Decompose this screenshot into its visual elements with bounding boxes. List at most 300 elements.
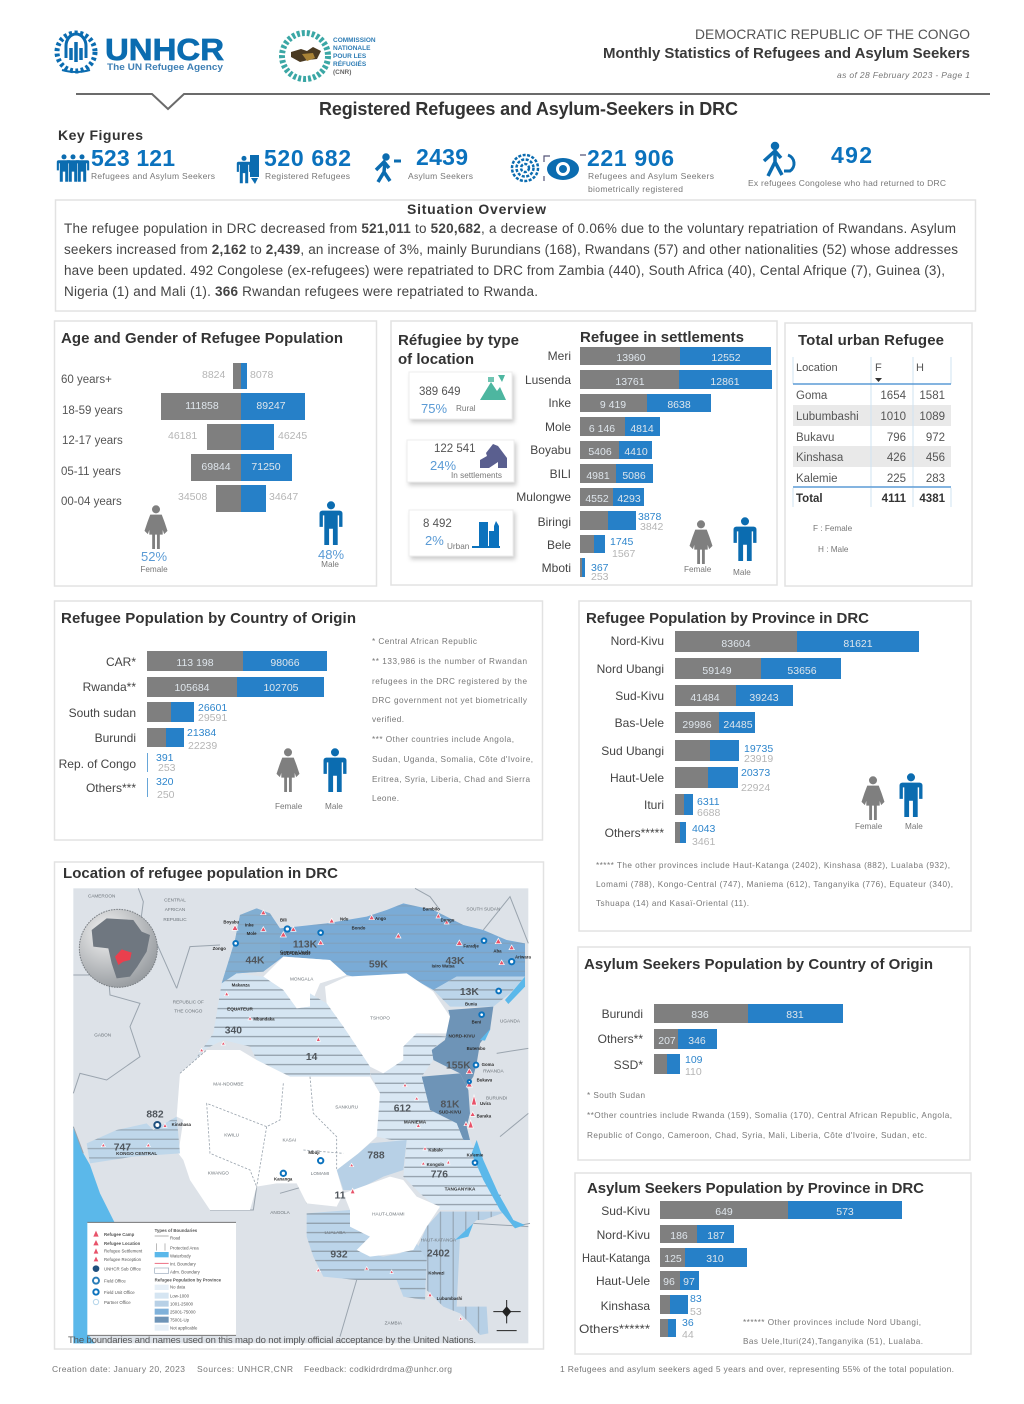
urban refugee table: 4111 — [882, 493, 907, 505]
overview text: seekers increased from 2,162 to 2,439, an increase of 3%, mainly Burundians (168), Rwandans (57) and other nationalities (52) whose addresses — [64, 242, 958, 257]
province labels: Bas-Uele — [615, 716, 664, 730]
province labels: Nord-Kivu — [597, 1228, 650, 1242]
country bar chart: 250 — [157, 789, 175, 801]
refugee counts: 612 — [394, 1104, 411, 1115]
female share — [140, 549, 168, 574]
country names: BURUNDI — [486, 1095, 507, 1100]
panel: asylum seekers by province — [575, 1173, 971, 1354]
settlement bar chart: 367 — [591, 562, 609, 574]
asylum country bar chart: 831 — [786, 1009, 804, 1021]
icon: female — [277, 748, 299, 792]
refugee counts: 81K — [441, 1099, 460, 1110]
figure: asylum seekers: 2439 — [416, 144, 468, 170]
settlement and town names: Beni — [472, 1019, 481, 1024]
province names: SUD-UBANGI — [280, 951, 310, 956]
province bar chart: 20373 — [741, 767, 770, 779]
map legend — [87, 1222, 236, 1335]
asylum province bar chart: 310 — [706, 1253, 724, 1265]
map disclaimer: The boundaries and names used on this map do not imply official acceptance by the United Nations. — [68, 1335, 476, 1346]
compass and scale — [493, 1300, 521, 1331]
country names: REPUBLIC — [163, 917, 187, 922]
settlement and town names: Mbuji — [308, 1150, 320, 1155]
settlement bar chart: 4814 — [630, 423, 654, 435]
province names: HAUT-KATANGA — [421, 1238, 457, 1243]
asylum province bar chart: 96 — [663, 1276, 675, 1288]
card: rural — [409, 372, 512, 419]
country labels — [59, 655, 136, 795]
province labels: Haut-Uele — [610, 771, 664, 785]
settlement and town names: Dungu — [441, 918, 455, 923]
header: commission logo — [282, 33, 376, 79]
footer: population footnote: 1 Refugees and asylum seekers aged 5 years and over, representing 55% of the total population. — [560, 1364, 954, 1374]
settlement and town names: Ndu — [340, 917, 349, 922]
footnotes: Eritrea, Syria, Liberia, Chad and Sierra — [372, 775, 530, 784]
commission name: RÉFUGIÉS — [333, 59, 367, 68]
card: settlements: In settlements — [451, 471, 502, 480]
map legend: Int. Boundary — [170, 1261, 197, 1266]
refugee counts: 44K — [246, 955, 265, 966]
figure: returnees: 492 — [831, 142, 872, 168]
male share: 48% — [318, 547, 344, 562]
province: lomami — [337, 1140, 407, 1190]
card: rural: 389 649 — [419, 386, 461, 398]
map of DRC — [73, 888, 531, 1343]
overview text — [64, 221, 958, 299]
footer: creation date, sources and feedback: Creation date: January 20, 2023 — [52, 1364, 185, 1374]
province: lualaba — [307, 1210, 427, 1300]
heading: type of location: of location — [398, 351, 474, 368]
settlement and town names: Zongo — [213, 946, 226, 951]
urban refugee table — [793, 357, 951, 507]
card: rural: 75% — [421, 401, 447, 416]
footnotes: refugees in the DRC registered by the — [372, 677, 527, 686]
province names: MANIEMA — [404, 1119, 427, 1124]
figure: refugees and asylum seekers: 523 121 — [91, 145, 175, 171]
heading: Refugee Population by Province in DRC — [586, 610, 869, 627]
heading: Total urban Refugee — [798, 332, 944, 349]
age labels: 18-59 years — [62, 405, 123, 417]
country names: CENTRAL — [164, 898, 186, 903]
settlement and town names: Aba — [493, 949, 502, 954]
settlement bar chart: 4552 — [585, 493, 609, 505]
settlement bar chart: 3878 — [638, 511, 662, 523]
settlement bar chart: 8638 — [667, 399, 691, 411]
main title: Registered Refugees and Asylum-Seekers in DRC — [319, 99, 738, 119]
panel: situation overview — [56, 200, 976, 311]
settlement labels: Meri — [548, 349, 571, 363]
country bar chart: 21384 — [187, 727, 216, 739]
settlement and town names: Isiro Watsa — [432, 963, 455, 968]
settlement bar chart: 1567 — [612, 548, 636, 560]
province bar chart: 29986 — [682, 719, 712, 731]
globe inset — [79, 909, 157, 987]
province names: EQUATEUR — [227, 1007, 254, 1012]
key figures heading: Key Figures — [58, 127, 143, 143]
urban refugee table: 1010 — [880, 411, 906, 423]
age labels: 05-11 years — [61, 466, 121, 478]
province labels: Haut-Katanga — [582, 1251, 650, 1265]
settlement labels: Lusenda — [525, 373, 571, 387]
province bar chart: 6688 — [697, 807, 721, 819]
country bar chart: 320 — [156, 776, 174, 788]
figure: registered refugees: Registered Refugees — [265, 171, 350, 181]
urban refugee table: 283 — [926, 473, 945, 485]
heading: Asylum Seekers Population by Country of Origin — [584, 956, 933, 973]
legend labels — [855, 822, 923, 831]
province names: KWILU — [224, 1133, 239, 1138]
refugee counts: 932 — [330, 1249, 348, 1260]
population pyramid: 46181 — [168, 430, 197, 442]
settlement and town names: Bukavu — [477, 1078, 493, 1083]
table key: F : Female — [813, 524, 853, 533]
urban refugee table: Kinshasa — [796, 452, 844, 464]
population pyramid: 8078 — [250, 369, 274, 381]
settlement bar chart: 1745 — [610, 536, 634, 548]
urban refugee table: Location — [796, 362, 838, 374]
urban refugee table: 1089 — [919, 411, 945, 423]
asylum province bar chart: 573 — [836, 1206, 854, 1218]
map legend: Refugee Camp — [104, 1232, 135, 1237]
country labels: CAR* — [106, 655, 136, 669]
settlement and town names: Uvira — [480, 1101, 491, 1106]
footnotes: Sudan, Uganda, Somalia, Côte d'Ivoire, — [372, 755, 533, 764]
province bar chart: 3461 — [692, 836, 716, 848]
legend labels: Female — [855, 822, 883, 831]
population pyramid: 69844 — [201, 461, 231, 473]
icon: female — [145, 505, 167, 549]
country names: CAMEROON — [88, 893, 115, 898]
province bar chart: 4043 — [692, 823, 716, 835]
refugee counts: 43K — [446, 956, 465, 967]
country names: RWANDA — [483, 1069, 504, 1074]
figure: returnees: Ex refugees Congolese who had returned to DRC — [748, 178, 946, 188]
asylum province bar chart: 125 — [664, 1253, 682, 1265]
footnotes: *** Other countries include Angola, — [372, 735, 514, 744]
urban refugee table: 4381 — [919, 493, 946, 505]
asylum country bar chart: 207 — [658, 1035, 676, 1047]
refugee counts: 747 — [114, 1143, 131, 1154]
province labels: Sud-Kivu — [615, 689, 664, 703]
header: UNHCR logo — [57, 32, 224, 73]
province labels: Nord Ubangi — [597, 662, 664, 676]
settlement and town names: Makanza — [232, 983, 250, 988]
panel: refugee population by province — [579, 601, 971, 931]
footnotes — [743, 1318, 923, 1346]
figure: returnees — [748, 142, 946, 188]
province bar chart: 39243 — [749, 692, 779, 704]
province bar chart: 24485 — [723, 719, 753, 731]
refugee counts: 2402 — [427, 1249, 450, 1260]
male share — [318, 547, 344, 569]
icon: male — [324, 748, 346, 792]
icon: female — [862, 776, 884, 820]
commission name: COMMISSION — [333, 37, 376, 44]
settlement and town names: Goma — [482, 1062, 495, 1067]
urban refugee table: Goma — [796, 390, 828, 402]
province: northern band — [222, 903, 525, 990]
country labels: South sudan — [69, 706, 136, 720]
province bar chart: 59149 — [702, 665, 732, 677]
map legend: Adm. Boundary — [170, 1269, 201, 1274]
map legend: Refugee Population by Province — [155, 1277, 222, 1282]
province bar chart — [675, 631, 919, 848]
footnotes: verified. — [372, 715, 404, 724]
red location markers — [101, 910, 514, 1320]
icon: fingerprint and eye — [512, 155, 586, 181]
icon: UNHCR emblem — [57, 33, 95, 72]
footnotes: * South Sudan — [587, 1091, 645, 1100]
panel: type of location and settlements — [391, 321, 777, 585]
overview text: The refugee population in DRC decreased from 521,011 to 520,682, a decrease of 0.06% due to the voluntary repatriation of Rwandans. Asylum — [64, 221, 956, 236]
footnotes — [372, 637, 533, 803]
heading: Location of refugee population in DRC — [63, 865, 338, 882]
settlement labels: Biringi — [538, 515, 571, 529]
footer: creation date, sources and feedback: Feedback: codkidrdrdma@unhcr.org — [304, 1364, 452, 1374]
age labels — [61, 374, 123, 508]
province labels: Nord-Kivu — [611, 634, 664, 648]
country labels — [598, 1007, 643, 1072]
province names: KONGO CENTRAL — [116, 1151, 157, 1156]
map legend: Refugee Location — [104, 1241, 141, 1246]
urban refugee table: 1581 — [919, 390, 945, 402]
province: haut-lomami — [343, 1177, 440, 1257]
refugee counts: 13K — [460, 987, 479, 998]
settlement and town names: Ariwara — [515, 954, 531, 959]
province names: HAUT-LOMAMI — [372, 1211, 405, 1216]
urban refugee table: 225 — [887, 473, 906, 485]
population pyramid: 46245 — [278, 430, 307, 442]
footnotes: DRC government not yet biometrically — [372, 696, 528, 705]
asylum province bar chart: 649 — [715, 1206, 733, 1218]
settlement and town names: Gemena Lisala — [280, 949, 311, 954]
female share: Female — [140, 565, 168, 574]
panel: asylum seekers by country of origin — [578, 947, 970, 1160]
province labels: Sud-Kivu — [601, 1204, 650, 1218]
commission name: (CNR) — [333, 69, 351, 76]
map legend: UNHCR Sub Office — [104, 1267, 142, 1272]
icon: mountains — [480, 375, 506, 400]
blue office markers — [154, 926, 514, 1176]
settlement and town names: Faradje — [463, 943, 479, 948]
settlement and town names: Baraka — [477, 1113, 492, 1118]
heading: type of location: Réfugiee by type — [398, 332, 519, 349]
urban refugee table: F — [875, 362, 882, 374]
commission name: POUR LES — [333, 53, 367, 60]
province bar chart: 6311 — [697, 796, 720, 808]
country names: SOUTH SUDAN — [466, 907, 500, 912]
settlement and town names: Bambilo — [423, 907, 440, 912]
card: urban: Urban — [447, 542, 470, 551]
wordmark: UNHCR — [105, 32, 224, 67]
footnotes: ***** The other provinces include Haut-Katanga (2402), Kinshasa (882), Lualaba (932), — [596, 861, 950, 870]
footer: creation date, sources and feedback — [52, 1364, 452, 1374]
asylum country bar chart: 346 — [688, 1035, 706, 1047]
settlement bar chart: 13960 — [616, 352, 646, 364]
key figures — [57, 127, 946, 194]
settlement bar chart: 4410 — [624, 446, 648, 458]
footnotes: ** 133,986 is the number of Rwandan — [372, 657, 527, 666]
population pyramid: 34647 — [269, 491, 298, 503]
settlement and town names — [172, 907, 531, 1301]
panel: total urban refugee — [785, 323, 972, 586]
heading: type of location — [398, 332, 519, 368]
province names: LOMAMI — [311, 1171, 329, 1176]
population pyramid: 34508 — [178, 491, 207, 503]
card: urban — [409, 510, 513, 556]
heading: Asylum Seekers Population by Province in DRC — [587, 1180, 924, 1197]
footer: creation date, sources and feedback: Sources: UNHCR,CNR — [197, 1364, 293, 1374]
legend labels — [684, 565, 751, 577]
icon: three people — [57, 154, 89, 182]
date line: as of 28 February 2023 - Page 1 — [837, 70, 970, 80]
lakes — [455, 977, 525, 1240]
icon: male — [320, 501, 342, 545]
refugee counts: 59K — [369, 959, 388, 970]
province bar chart: 53656 — [787, 665, 817, 677]
refugee counts — [114, 939, 479, 1260]
province labels — [579, 1204, 650, 1336]
legend labels: Male — [733, 568, 751, 577]
country bar chart: 253 — [158, 762, 176, 774]
icon: wreath with handshake — [282, 33, 328, 79]
asylum country bar chart: 109 — [685, 1054, 703, 1066]
province labels: Haut-Uele — [596, 1274, 650, 1288]
figure: biometric registration: Refugees and Asylum Seekers — [588, 171, 714, 181]
settlement labels: Mulongwe — [516, 490, 571, 504]
province: kongo central — [87, 1117, 180, 1163]
figure: asylum seekers — [376, 144, 473, 182]
population pyramid: 8824 — [202, 369, 226, 381]
settlement and town names: Butembo — [467, 1046, 486, 1051]
province: central kasai and kwilu block — [177, 1050, 380, 1210]
settlement and town names: Bunia — [465, 1001, 478, 1006]
settlement and town names: Inke — [245, 923, 254, 928]
urban refugee table: 426 — [887, 452, 906, 464]
country bar chart: 391 — [156, 752, 174, 764]
icon: shelters — [480, 444, 507, 468]
province bar chart: 81621 — [843, 638, 873, 650]
settlement and town names: Lubumbashi — [437, 1296, 462, 1301]
province names: KWANGO — [208, 1171, 229, 1176]
settlement bar chart: 3842 — [640, 521, 664, 533]
table key — [813, 524, 853, 554]
urban refugee table: H — [916, 362, 924, 374]
settlement and town names: Bili — [280, 918, 287, 923]
population pyramid: 71250 — [251, 461, 281, 473]
settlement bar chart: 9 419 — [600, 399, 626, 411]
table key: H : Male — [818, 545, 849, 554]
asylum province bar chart: 44 — [682, 1329, 694, 1341]
legend labels: Male — [325, 802, 343, 811]
province labels: Kinshasa — [601, 1299, 650, 1313]
province labels: Others****** — [579, 1322, 650, 1336]
legend labels: Male — [905, 822, 923, 831]
province: tanganyika — [403, 1140, 507, 1210]
figure: asylum seekers: Asylum Seekers — [408, 171, 473, 181]
settlement bar chart: 12552 — [711, 352, 741, 364]
country labels: Rwanda** — [83, 680, 136, 694]
card: settlements: 122 541 — [434, 443, 476, 455]
country names: ZAMBIA — [385, 1321, 403, 1326]
map legend: Field Unit Office — [104, 1290, 135, 1295]
asylum country bar chart — [654, 1004, 843, 1078]
province names: NORD-KIVU — [448, 1033, 475, 1038]
footnotes: Tshuapa (14) and Kasaï-Oriental (11). — [596, 899, 749, 908]
icon: person with return arrow — [764, 144, 794, 176]
province bar chart: 23919 — [744, 753, 773, 765]
province labels: Others***** — [605, 826, 664, 840]
settlement bar chart: 4293 — [617, 493, 641, 505]
female share: 52% — [141, 549, 167, 564]
province names: SUD-KIVU — [439, 1109, 462, 1114]
map legend: Types of Boundaries — [155, 1228, 198, 1233]
overview text: Nigeria (1) and Mali (1). 366 Rwandan refugees were repatriated to Rwanda. — [64, 284, 538, 299]
footnotes: Leone. — [372, 794, 399, 803]
country labels: Burundi — [95, 731, 136, 745]
map legend: Refugee Reception — [104, 1257, 142, 1262]
settlement labels: Inke — [548, 396, 571, 410]
age labels: 00-04 years — [61, 496, 122, 508]
map legend: 75001-Up — [170, 1317, 190, 1322]
population pyramid: 89247 — [256, 400, 286, 412]
figure: biometric registration — [512, 145, 714, 194]
card: settlements: 24% — [430, 458, 456, 473]
legend labels: Female — [684, 565, 712, 574]
country bar chart: 105684 — [174, 682, 210, 694]
footnotes: Bas Uele,Ituri(24),Tanganyika (51), Lualaba. — [743, 1337, 923, 1346]
province names: TSHOPO — [370, 1015, 390, 1020]
heading: Age and Gender of Refugee Population — [61, 330, 343, 347]
country labels: Rep. of Congo — [59, 757, 136, 771]
urban refugee table: 1654 — [880, 390, 907, 402]
ocean — [73, 1127, 115, 1343]
footnotes: Lomami (788), Kongo-Central (747), Maniema (612), Tanganyika (776), Equateur (340), — [596, 880, 953, 889]
province names: MAI-NDOMBE — [213, 1081, 243, 1086]
footnotes — [587, 1091, 952, 1140]
card: urban: 2% — [425, 533, 444, 548]
population pyramid — [161, 363, 307, 512]
province: ituri — [433, 977, 525, 1007]
heading: Situation Overview — [407, 201, 546, 217]
urban refugee table: Kalemie — [796, 473, 838, 485]
province: sud-kivu — [422, 1073, 470, 1140]
country names: ANGOLA — [270, 1210, 291, 1215]
neighbour borders — [73, 888, 530, 1337]
urban refugee table: Total — [796, 493, 823, 505]
population pyramid: 111858 — [185, 400, 219, 412]
province: equateur and tshuapa — [190, 973, 370, 1077]
figure: biometric registration: biometrically registered — [588, 184, 683, 194]
province names: MONGALA — [290, 977, 314, 982]
country bar chart: 102705 — [263, 682, 299, 694]
figure: refugees and asylum seekers — [57, 145, 215, 182]
country bar chart: 113 198 — [176, 657, 214, 669]
settlement bar chart: 5406 — [588, 446, 612, 458]
refugee counts: 11 — [335, 1190, 346, 1201]
settlement labels: BILI — [550, 467, 571, 481]
urban refugee table: 972 — [926, 432, 945, 444]
country bar chart: 22239 — [188, 740, 217, 752]
province names: TANGANYIKA — [445, 1187, 476, 1192]
refugee counts: 340 — [225, 1025, 242, 1036]
asylum province bar chart: 36 — [682, 1317, 694, 1329]
province names — [116, 951, 476, 1243]
settlement and town names: Kalemie — [467, 1153, 484, 1158]
age labels: 60 years+ — [61, 374, 112, 386]
settlement bar chart: 13761 — [615, 376, 645, 388]
map legend: Road — [170, 1235, 181, 1240]
icon: walking person with arrow — [376, 155, 401, 182]
